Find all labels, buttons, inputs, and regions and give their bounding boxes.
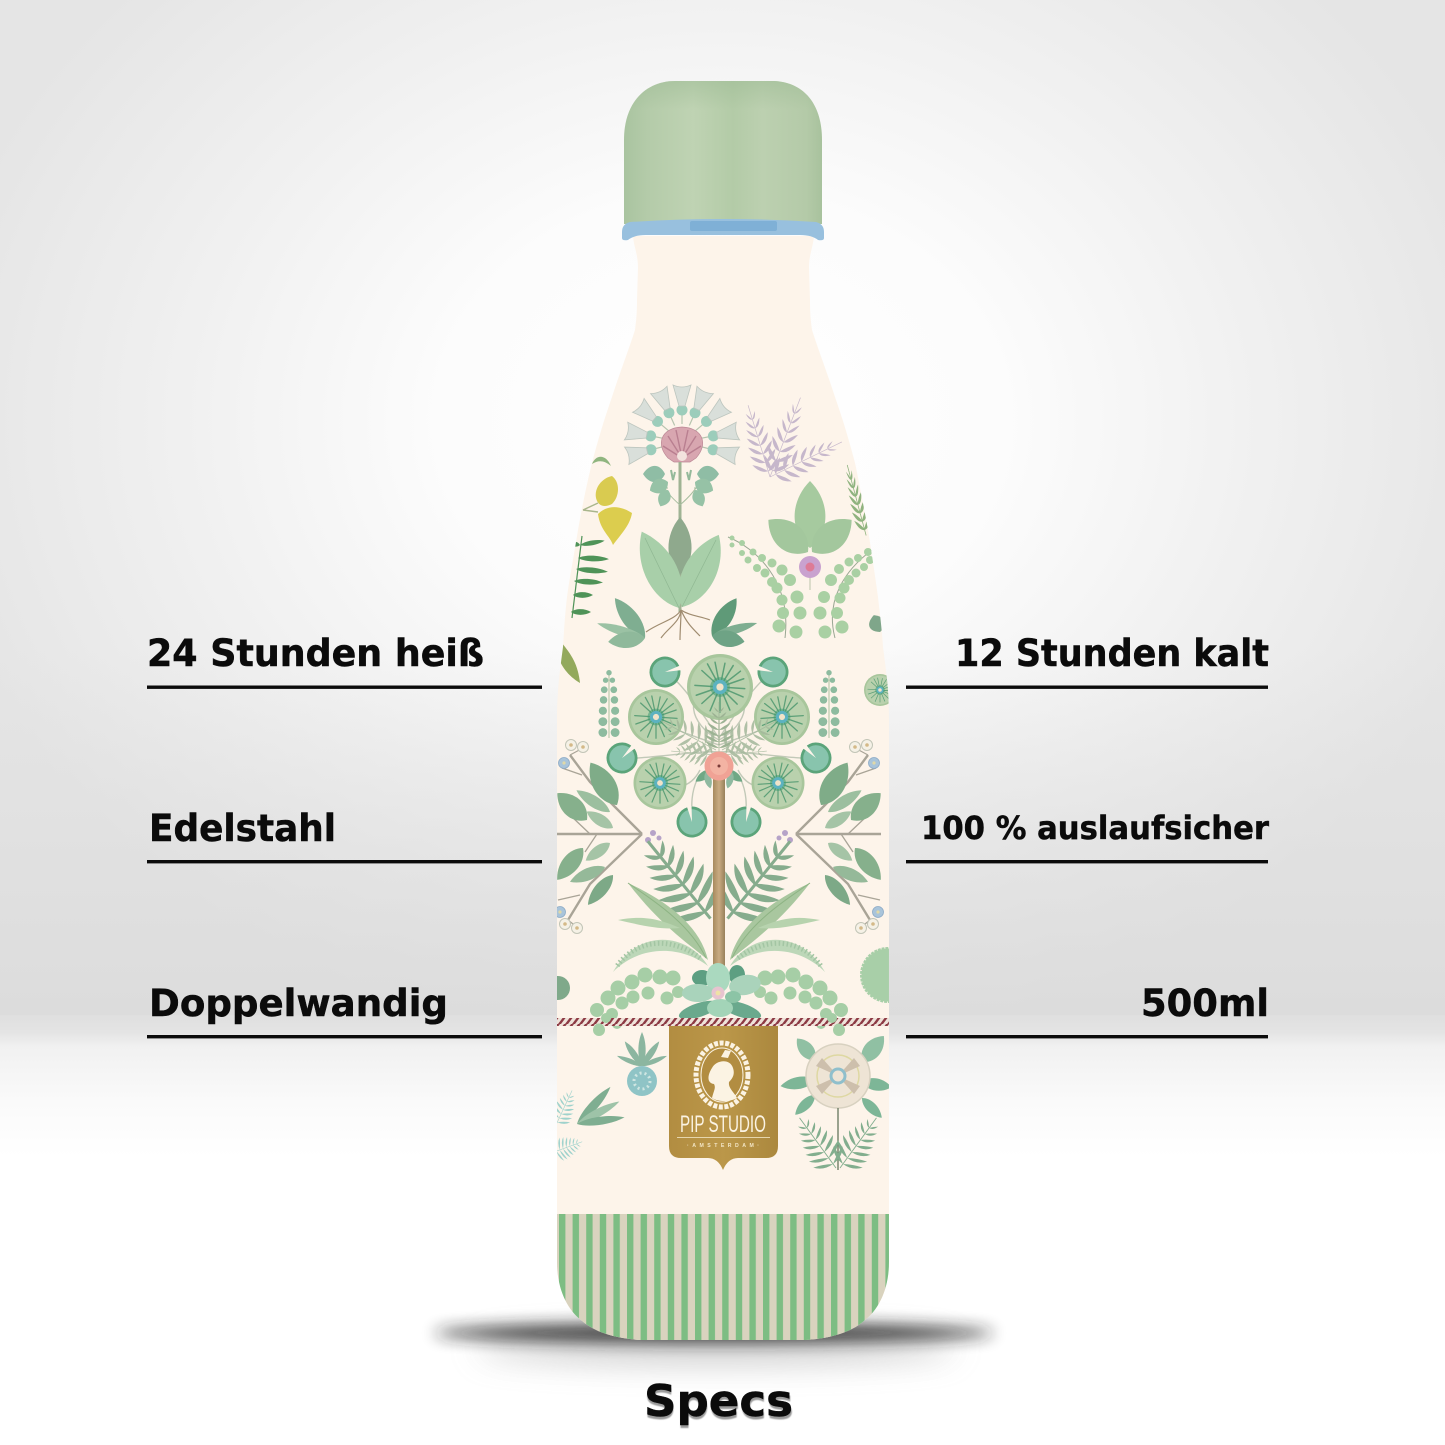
heading: Specs: Specs <box>644 1376 793 1427</box>
heading: Specs: Specs <box>644 1379 794 1430</box>
botanical: yellow flowers <box>583 457 632 545</box>
spec: double walled: Doppelwandig <box>149 982 448 1025</box>
spec: stainless steel: Edelstahl <box>149 807 336 850</box>
botanical: palm tree left half <box>557 656 719 1036</box>
cameo silhouette <box>696 1043 748 1107</box>
botanical: round-leaf fern arcs <box>728 536 874 638</box>
left spec labels <box>147 632 542 1038</box>
spec: volume <box>906 982 1269 1038</box>
botanical: pale rose with leaves <box>780 1036 889 1170</box>
botanical: trifoliate leaf with pink flower <box>768 481 852 590</box>
bottle <box>557 81 889 1340</box>
spec: leak proof <box>906 809 1269 863</box>
botanical: fan flower with shell <box>624 385 740 612</box>
brand name: PIP STUDIO <box>680 1111 766 1138</box>
botanical: dark green fern left edge <box>570 536 609 618</box>
background: studio wall <box>0 0 1445 1040</box>
bottle body <box>557 236 889 1340</box>
botanical: right edge fern <box>846 464 868 536</box>
botanical: blue pineapple <box>616 1032 668 1096</box>
spec: leak proof: 100 % auslaufsicher <box>921 809 1269 847</box>
botanical: right edge spiky seed head <box>860 947 889 1003</box>
botanical: small leaf right edge <box>869 615 882 632</box>
spec: 12 hours cold <box>906 632 1269 689</box>
botanical: centre four-petal flower <box>678 963 762 1018</box>
striped base <box>550 1214 895 1344</box>
background: studio floor <box>0 1015 1445 1445</box>
bottle ground shadow <box>434 1324 994 1362</box>
lid <box>622 81 824 240</box>
botanical: left edge olive leaf <box>560 644 580 683</box>
botanical: right edge lily pad <box>864 674 889 706</box>
botanical: fern stems over ribbon <box>594 1013 844 1028</box>
spec: 24 hours hot: 24 Stunden heiß <box>147 632 484 675</box>
spec: double walled <box>147 982 542 1038</box>
botanical: top frond and lily pad <box>687 654 753 752</box>
gold label <box>669 1026 778 1170</box>
spec: 12 hours cold: 12 Stunden kalt <box>955 632 1269 675</box>
right spec labels <box>906 632 1269 1038</box>
botanical: rooted plant <box>596 517 758 650</box>
green cap <box>624 81 822 224</box>
botanical: sprig of leaves <box>577 1087 624 1126</box>
botanical: palm trunk <box>713 770 725 967</box>
botanical: left edge teal ferns <box>557 1090 582 1160</box>
label rule <box>677 1137 770 1138</box>
body edge shading <box>888 1022 889 1024</box>
brand subline: ·AMSTERDAM· <box>687 1143 759 1149</box>
blue ring <box>622 219 824 240</box>
spec: volume: 500ml <box>1141 982 1269 1025</box>
spec: stainless steel <box>147 807 542 863</box>
twisted ribbon <box>550 1018 895 1026</box>
label shield <box>669 1026 778 1170</box>
botanical: palm tree right half <box>719 656 884 1036</box>
botanical: lilac fronds <box>746 398 842 482</box>
background: wall shading near the floor <box>0 650 1445 1030</box>
botanical: left edge seed head <box>557 976 570 1000</box>
spec: 24 hours hot <box>147 632 542 689</box>
botanical: pink blossom <box>704 752 734 780</box>
